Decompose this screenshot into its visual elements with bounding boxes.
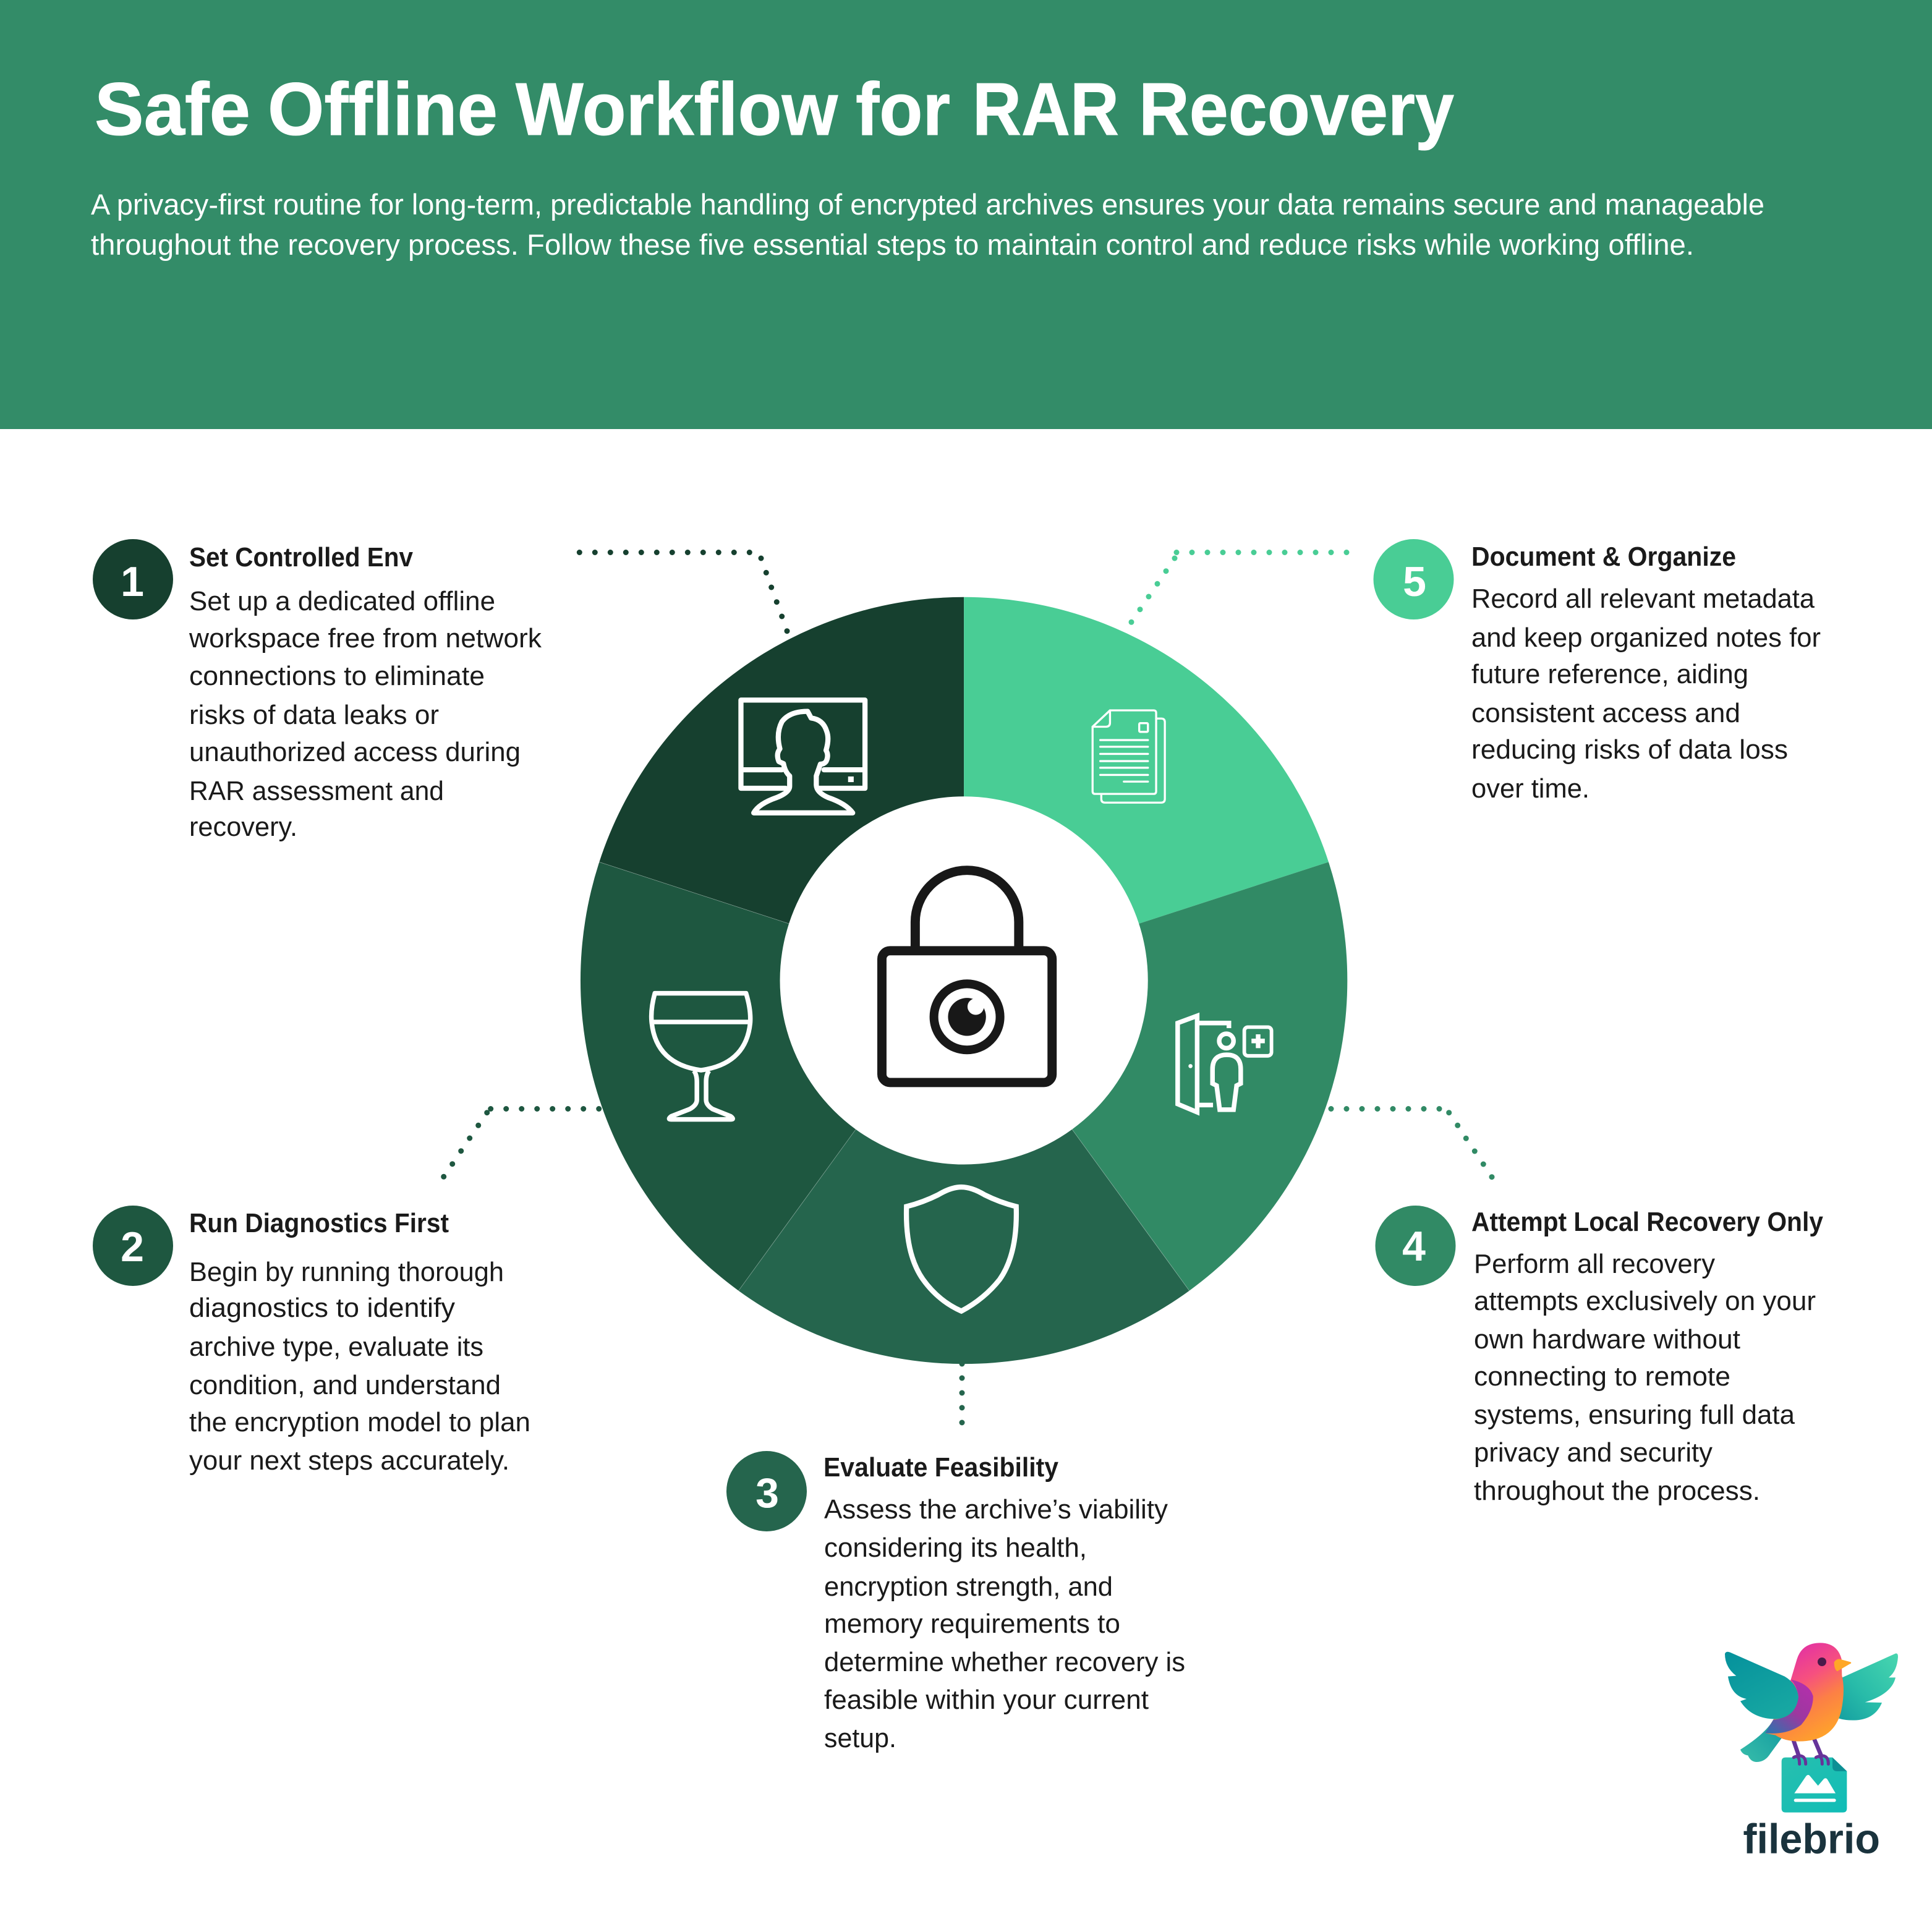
- tail: [1740, 1720, 1782, 1762]
- body 4: attempts exclusively on your: [1474, 1286, 1816, 1316]
- body 1: recovery.: [189, 812, 297, 842]
- body 2: Begin by running thorough: [189, 1257, 504, 1287]
- body 2: condition, and understand: [189, 1370, 501, 1400]
- badge 3: 3: [755, 1470, 779, 1517]
- heading 1: Set Controlled Env: [189, 542, 413, 572]
- step 3: [726, 1451, 1185, 1753]
- segment 2: [581, 862, 856, 1291]
- connector: step 5 dotted line: [1129, 550, 1349, 625]
- body 1: RAR assessment and: [189, 776, 444, 806]
- heading 3: Evaluate Feasibility: [823, 1452, 1058, 1483]
- body 3: determine whether recovery is: [824, 1647, 1185, 1677]
- body 4: Perform all recovery: [1474, 1249, 1715, 1279]
- body 3: considering its health,: [824, 1533, 1087, 1563]
- segment 4: [1072, 862, 1347, 1291]
- title: Offline: [268, 67, 498, 151]
- donut diagram: [581, 597, 1347, 1364]
- icon: monitor with person: [741, 700, 865, 813]
- body 3: Assess the archive’s viability: [824, 1494, 1168, 1525]
- body 3: feasible within your current: [824, 1685, 1149, 1715]
- connector: step 4 dotted line: [1328, 1106, 1495, 1180]
- file icon: [1782, 1758, 1847, 1813]
- badge 1: 1: [121, 558, 144, 605]
- connector: step 3 dotted line: [960, 1361, 964, 1426]
- connector: step 1 dotted line: [577, 550, 790, 634]
- bird toes: [1794, 1756, 1828, 1764]
- body 1: risks of data leaks or: [189, 700, 439, 730]
- body 2: the encryption model to plan: [189, 1407, 530, 1437]
- connector: step 2 dotted line: [441, 1106, 602, 1180]
- icon: central lock with eye: [882, 870, 1052, 1083]
- icon: shield: [906, 1187, 1016, 1311]
- header banner: [0, 0, 1932, 429]
- body 1: Set up a dedicated offline: [189, 586, 495, 616]
- title: RAR: [972, 67, 1119, 151]
- body 5: future reference, aiding: [1471, 659, 1748, 689]
- body shading: [1765, 1680, 1813, 1734]
- step 5: [1374, 539, 1821, 804]
- title: Workflow: [516, 67, 838, 151]
- badge 3: [726, 1451, 807, 1531]
- logo: filebrio bird: [1725, 1643, 1898, 1863]
- body 5: reducing risks of data loss: [1471, 734, 1788, 765]
- body: [1765, 1643, 1844, 1742]
- segment 5: [964, 597, 1329, 924]
- subtitle: [91, 188, 1764, 261]
- body 5: Record all relevant metadata: [1471, 584, 1815, 614]
- left wing: [1725, 1652, 1798, 1719]
- body 4: [1474, 1249, 1816, 1506]
- body 5: consistent access and: [1471, 698, 1740, 728]
- body 4: systems, ensuring full data: [1474, 1400, 1795, 1430]
- step 2: [93, 1206, 530, 1476]
- title: [95, 67, 1454, 151]
- body 5: [1471, 584, 1821, 804]
- body 4: connecting to remote: [1474, 1361, 1730, 1392]
- title: for: [856, 67, 950, 151]
- beak: [1834, 1659, 1851, 1671]
- body 2: diagnostics to identify: [189, 1293, 455, 1323]
- body 4: throughout the process.: [1474, 1476, 1760, 1506]
- icon: wine glass: [652, 994, 751, 1120]
- step 4: [1375, 1206, 1823, 1506]
- body 1: unauthorized access during: [189, 737, 521, 767]
- heading 2: Run Diagnostics First: [189, 1208, 449, 1238]
- badge 5: 5: [1403, 558, 1426, 605]
- icon: door and person with medical sign: [1178, 1016, 1272, 1112]
- wordmark: filebrio: [1743, 1816, 1880, 1863]
- body 3: setup.: [824, 1723, 896, 1753]
- badge 1: [93, 539, 173, 619]
- body 1: [189, 586, 542, 842]
- icon: document: [1092, 710, 1165, 802]
- title: Recovery: [1139, 67, 1454, 151]
- body 5: and keep organized notes for: [1471, 623, 1821, 653]
- segment 3: [739, 1130, 1189, 1364]
- heading 5: Document & Organize: [1471, 542, 1736, 572]
- body 1: connections to eliminate: [189, 661, 485, 691]
- right wing: [1838, 1653, 1898, 1721]
- badge 2: 2: [121, 1223, 144, 1270]
- bird legs: [1794, 1738, 1822, 1758]
- body 1: workspace free from network: [189, 623, 542, 653]
- body 3: encryption strength, and: [824, 1572, 1113, 1602]
- subtitle: throughout the recovery process. Follow these five essential steps to maintain control and reduce risks while working offline.: [91, 228, 1694, 261]
- step 1: [93, 539, 542, 842]
- heading 4: Attempt Local Recovery Only: [1471, 1207, 1823, 1237]
- body 2: archive type, evaluate its: [189, 1332, 483, 1362]
- body 3: memory requirements to: [824, 1609, 1120, 1639]
- badge 5: [1374, 539, 1454, 619]
- body 4: privacy and security: [1474, 1437, 1713, 1468]
- badge 4: [1375, 1206, 1455, 1286]
- body 2: [189, 1257, 530, 1476]
- badge 4: 4: [1402, 1223, 1426, 1270]
- segment 1: [599, 597, 964, 924]
- body 3: [824, 1494, 1185, 1753]
- badge 2: [93, 1206, 173, 1286]
- body 5: over time.: [1471, 773, 1589, 804]
- subtitle: A privacy-first routine for long-term, predictable handling of encrypted archives ensures your data remains secure and manageable: [91, 188, 1764, 221]
- body 2: your next steps accurately.: [189, 1445, 509, 1476]
- eye: [1818, 1658, 1826, 1666]
- body 4: own hardware without: [1474, 1324, 1740, 1355]
- title: Safe: [95, 67, 250, 151]
